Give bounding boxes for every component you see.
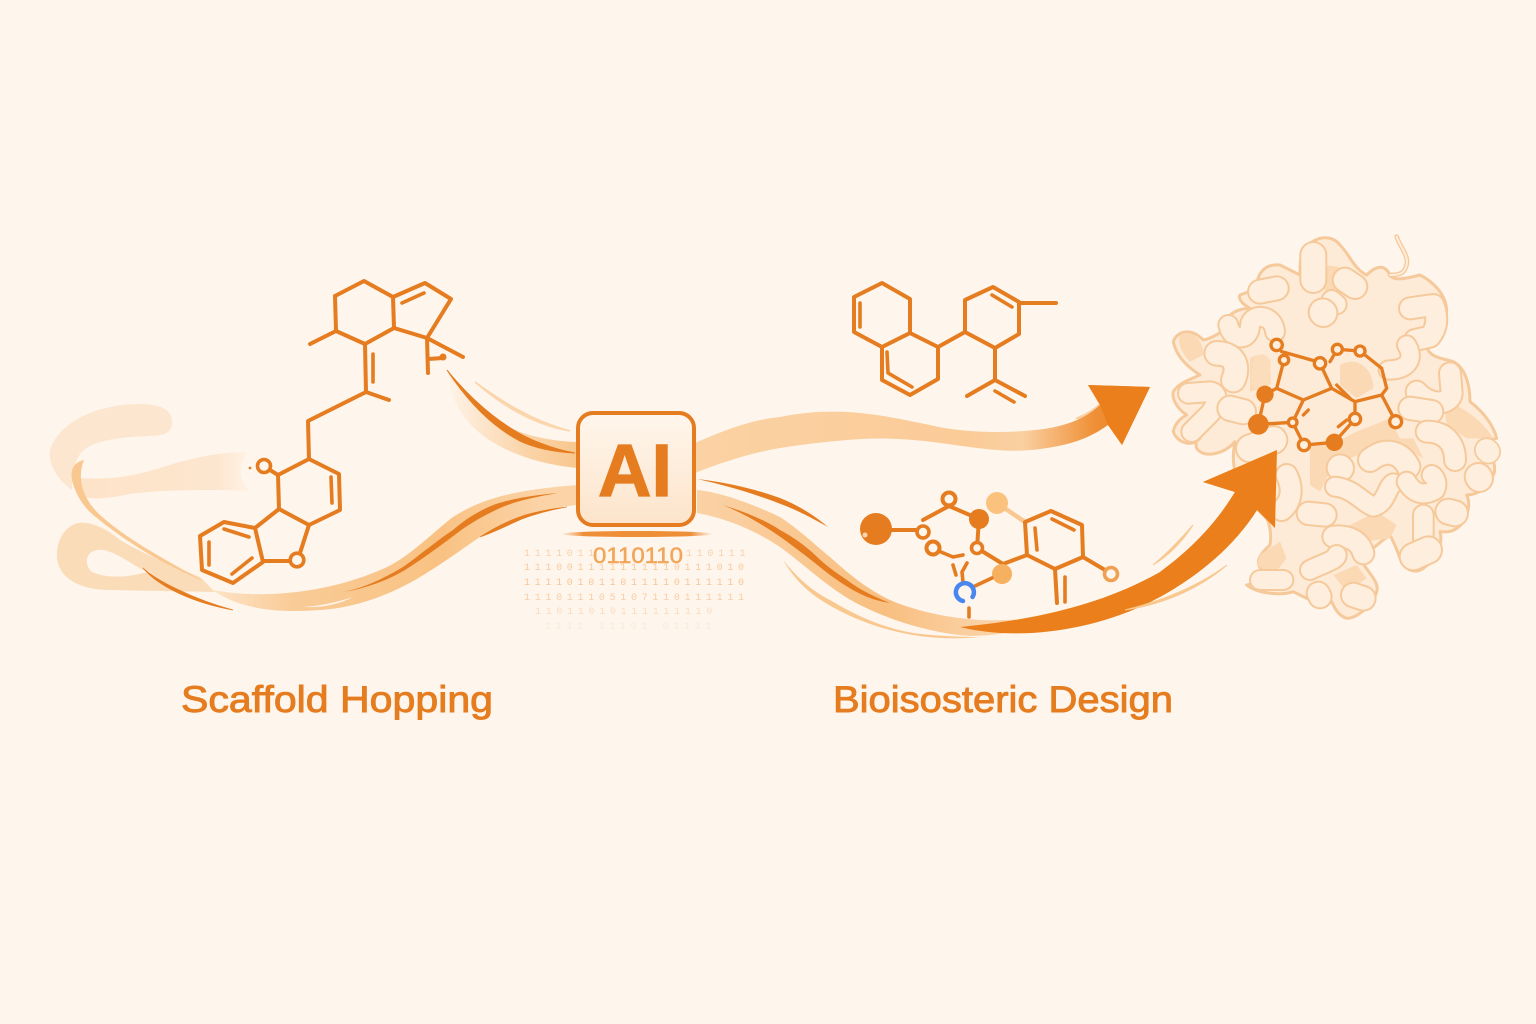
binary data field: 11011010111111110 — [535, 607, 717, 618]
binary data field: 1111011 — [524, 549, 599, 560]
AI chip — [578, 413, 694, 525]
upper-left ribbon into AI — [447, 370, 577, 468]
icon: blue open ring atom — [956, 583, 974, 601]
binary data field: 0110110 — [593, 543, 683, 568]
lower molecule: bioisostere with atoms — [860, 492, 1118, 617]
upper-right arrow — [695, 385, 1150, 473]
protein: shaded interior patches — [1179, 266, 1493, 592]
binary data field: 111011105107110111111 — [524, 593, 749, 604]
AI chip: AI — [598, 429, 672, 512]
binary data field: 110111 — [686, 549, 750, 560]
left flowing ribbons — [50, 404, 578, 611]
lower-right arrow head over protein — [1160, 450, 1277, 597]
protein surface with bound ligand — [1173, 237, 1497, 618]
AI chip shadow — [561, 531, 713, 537]
binary data field: 1111 11101 01111 — [545, 622, 716, 633]
binary data field: 111001111111110111010 — [524, 563, 749, 574]
label: Scaffold Hopping: Scaffold Hopping — [181, 679, 493, 720]
binary data field: 111101011011110111110 — [524, 578, 749, 589]
protein: coiled tubes — [1188, 237, 1488, 598]
ligand bound in pocket — [1248, 339, 1402, 451]
upper-right molecule: fused rings with biaryl link — [854, 283, 1056, 402]
binary data field — [524, 543, 750, 633]
left molecule: scaffold — [200, 281, 463, 583]
label: Bioisosteric Design: Bioisosteric Design — [833, 679, 1173, 720]
lower-right arrow ribbon — [697, 450, 1277, 638]
